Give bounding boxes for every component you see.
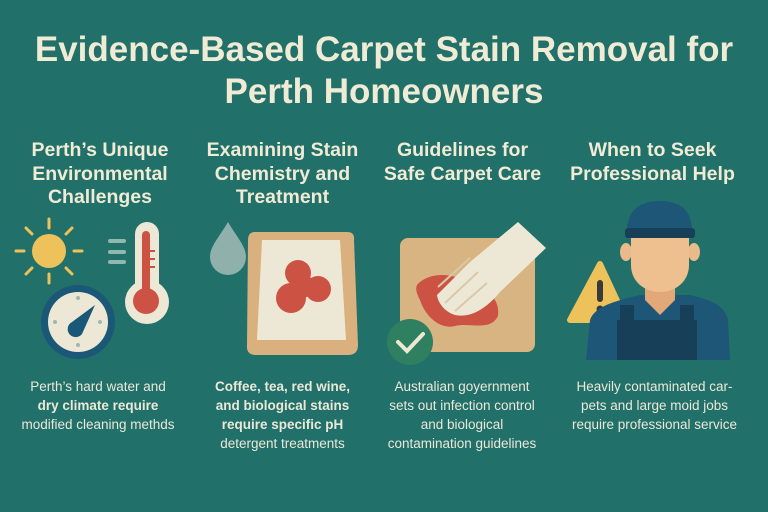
heading: col2: [207, 139, 358, 208]
icon: gauge: [41, 285, 115, 359]
body: col1: dry climate require: [38, 398, 158, 413]
body: col4: Heavily contaminated car-: [576, 379, 733, 394]
heading: col2: Chemistry and: [215, 162, 350, 184]
body: col3: [388, 379, 536, 451]
heading: col3: Guidelines for: [397, 139, 528, 161]
icon: speed lines: [110, 241, 124, 262]
title: [35, 30, 733, 111]
body: col3: and biological: [421, 417, 503, 432]
body: col2: Coffee, tea, red wine,: [215, 379, 350, 394]
heading: col4: Professional Help: [570, 162, 735, 184]
body: col3: sets out infection control: [389, 398, 535, 413]
icon: worker: [586, 201, 730, 360]
icon: carpet with stain: [247, 232, 358, 355]
icon: water drop: [210, 222, 246, 275]
body: col2: and biological stains: [216, 398, 349, 413]
body: col4: require professional service: [572, 417, 737, 432]
body: col3: Australian goyernment: [394, 379, 530, 394]
icon: carpet with hand: [400, 222, 546, 352]
title: Perth Homeowners: [225, 72, 543, 111]
heading: col1: [32, 139, 168, 208]
heading: col1: Challenges: [48, 186, 152, 208]
heading: col4: [570, 139, 735, 184]
heading: col1: Environmental: [32, 162, 168, 184]
icon: thermometer: [125, 222, 169, 324]
body: col1: [21, 379, 175, 432]
body: col4: pets and large moid jobs: [581, 398, 728, 413]
body: col2: detergent treatments: [220, 436, 345, 451]
body: col4: [572, 379, 737, 432]
heading: col3: [384, 139, 541, 184]
body: col2: [215, 379, 350, 451]
icon: checkmark: [387, 319, 433, 365]
body: col1: Perth’s hard water and: [30, 379, 166, 394]
heading: col2: Treatment: [236, 186, 329, 208]
title: Evidence-Based Carpet Stain Removal for: [35, 30, 733, 69]
heading: col2: Examining Stain: [207, 139, 358, 161]
body: col2: require specific pH: [222, 417, 343, 432]
heading: col1: Perth’s Unique: [32, 139, 168, 161]
heading: col3: Safe Carpet Care: [384, 162, 541, 184]
body: col3: contamination guidelines: [388, 436, 536, 451]
icon: warning: [570, 264, 626, 320]
body: col1: modified cleaning methds: [21, 417, 175, 432]
icon: sun: [16, 219, 82, 283]
heading: col4: When to Seek: [589, 139, 716, 161]
